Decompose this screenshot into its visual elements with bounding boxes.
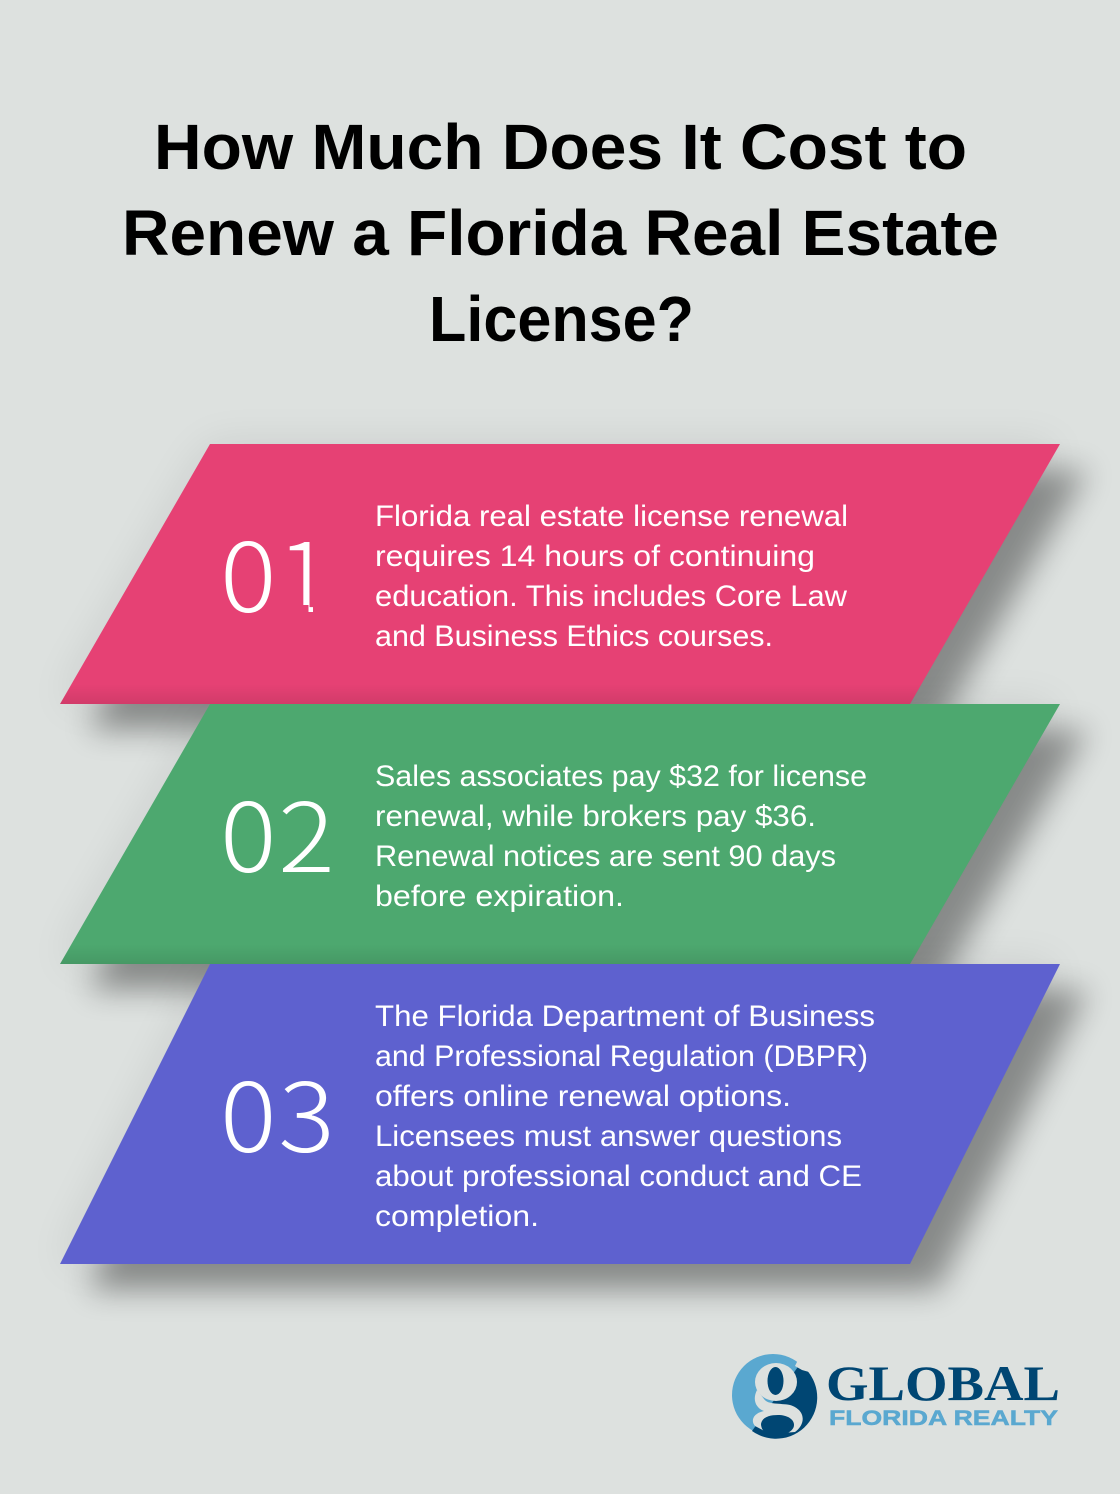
panel shadow: 03 (60, 964, 1088, 1290)
panel: 01 (60, 444, 1060, 704)
text block 03: completion. (375, 1200, 539, 1233)
text block 01: and Business Ethics courses. (375, 620, 773, 653)
text block 03 (375, 1000, 875, 1233)
text block 02: Sales associates pay $32 for license (375, 760, 867, 793)
title: Renew a Florida Real Estate (122, 197, 999, 269)
title: How Much Does It Cost to (154, 111, 967, 183)
text block 03: and Professional Regulation (DBPR) (375, 1040, 868, 1073)
title: License? (429, 283, 694, 355)
number 03: 03 (220, 1042, 335, 1181)
logo subline: FLORIDA REALTY (829, 1407, 1058, 1430)
icon: g in circle (732, 1354, 817, 1439)
title (122, 111, 999, 355)
text block 01: requires 14 hours of continuing (375, 540, 815, 573)
text block 02: before expiration. (375, 880, 624, 913)
text block 02 (375, 760, 867, 913)
text block 01: Florida real estate license renewal (375, 500, 848, 533)
text block 02: Renewal notices are sent 90 days (375, 840, 836, 873)
text block 01 (375, 500, 848, 653)
panel: 02 (60, 704, 1060, 964)
text block 03: The Florida Department of Business (375, 1000, 875, 1033)
panel shadow: 02 (60, 704, 1088, 990)
panel: 03 (60, 964, 1060, 1264)
text block 01: education. This includes Core Law (375, 580, 847, 613)
panel shadow: 01 (60, 444, 1088, 730)
logo (732, 1354, 1060, 1439)
text block 03: offers online renewal options. (375, 1080, 791, 1113)
text block 02: renewal, while brokers pay $36. (375, 800, 816, 833)
text block 03: about professional conduct and CE (375, 1160, 862, 1193)
logo wordmark: GLOBAL (826, 1355, 1060, 1411)
number 02: 02 (220, 762, 335, 901)
text block 03: Licensees must answer questions (375, 1120, 842, 1153)
number 01: 01 (220, 502, 333, 641)
